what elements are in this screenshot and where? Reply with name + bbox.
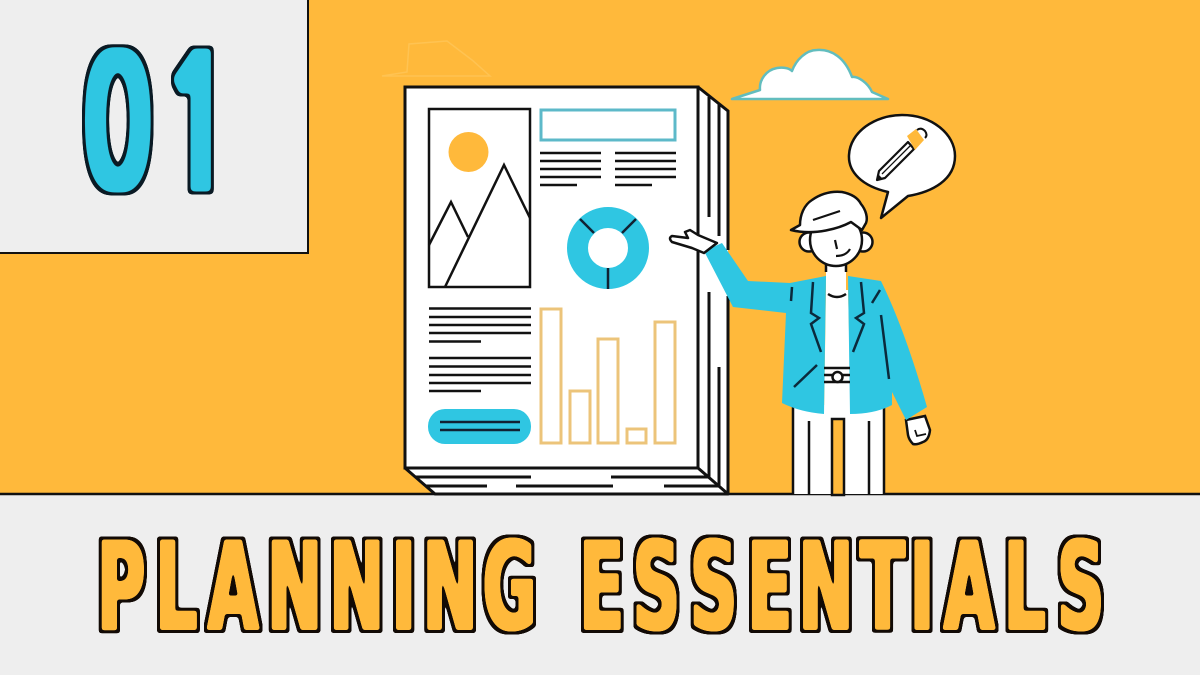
smile xyxy=(835,240,850,256)
text lines bottom xyxy=(429,308,531,391)
icon: pencil xyxy=(877,129,926,180)
front page xyxy=(405,87,698,468)
heading placeholder box xyxy=(541,110,675,140)
jacket xyxy=(704,243,927,420)
number 01: 01 xyxy=(83,35,233,217)
bar chart xyxy=(541,309,675,443)
left hand xyxy=(670,230,717,253)
trousers xyxy=(793,405,884,495)
donut chart xyxy=(578,218,638,289)
document illustration xyxy=(405,87,728,494)
right hand xyxy=(906,416,930,444)
page stack xyxy=(405,87,728,494)
panel: number box xyxy=(0,0,308,253)
cloud xyxy=(732,50,888,99)
neck xyxy=(826,262,846,297)
picture frame with sun and mountains xyxy=(429,109,530,287)
belt xyxy=(824,368,850,382)
button pill xyxy=(428,409,531,444)
shirt xyxy=(824,290,851,414)
panel: bottom title band xyxy=(0,494,1200,675)
ears xyxy=(800,232,872,252)
text lines top xyxy=(540,153,676,185)
faint background cloud xyxy=(382,41,490,76)
speech bubble with pencil xyxy=(849,115,955,218)
hair xyxy=(791,192,867,232)
person presenting xyxy=(670,192,930,495)
face xyxy=(810,214,862,266)
title: PLANNING ESSENTIALS xyxy=(97,517,1104,658)
